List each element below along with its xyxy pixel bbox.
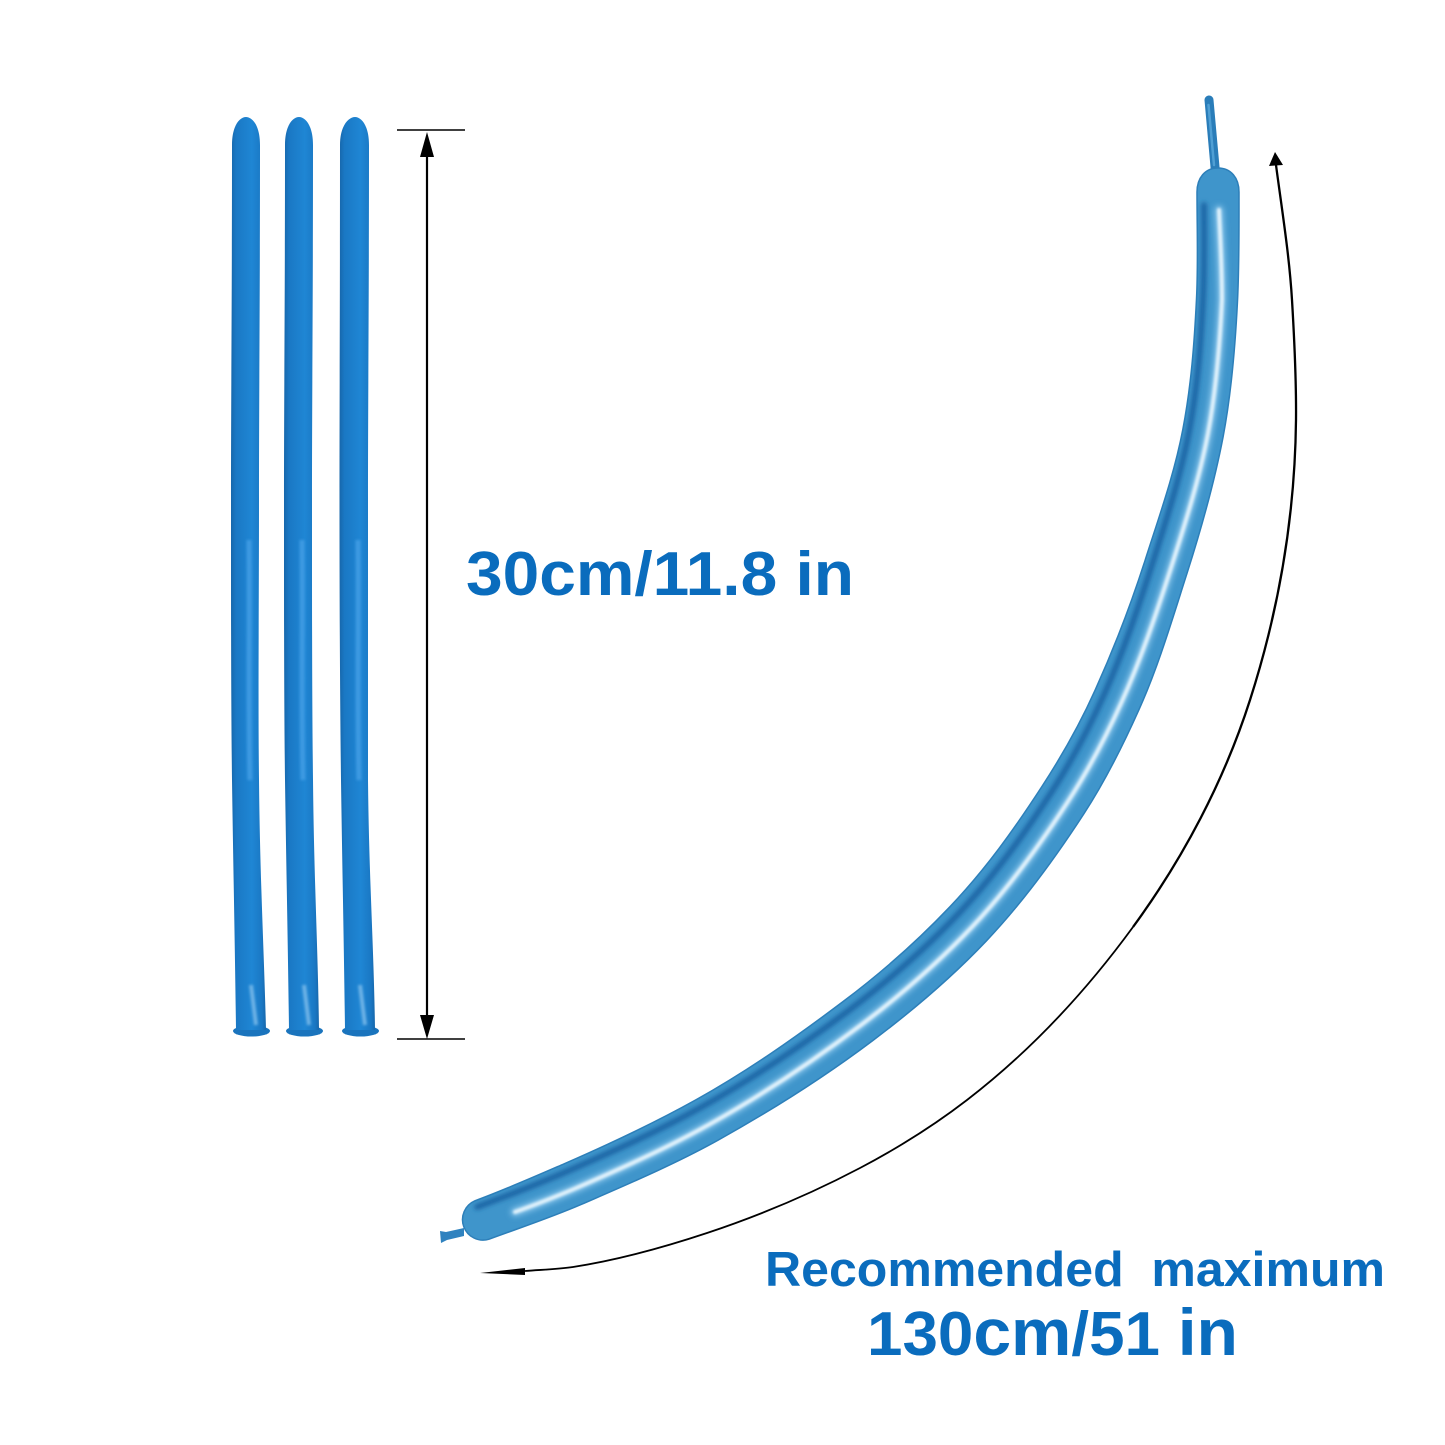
- white reflection streak: [515, 210, 1222, 1212]
- soft light band: [515, 210, 1222, 1212]
- balloon knot: [440, 1228, 464, 1243]
- label: 30cm/11.8 in: 30cm/11.8 in: [466, 540, 854, 609]
- uninflated balloon 2: [284, 117, 323, 1036]
- balloon tip: [1209, 100, 1216, 178]
- balloon body: [463, 168, 1239, 1240]
- label: 130cm/51 in: 130cm/51 in: [867, 1295, 1238, 1369]
- dimension arrow: 30cm: [397, 130, 465, 1039]
- label: recommended maximum: Recommended maximum: [765, 1243, 1385, 1297]
- inflated long balloon: [440, 100, 1239, 1243]
- uninflated balloon 3: [340, 117, 379, 1036]
- dark reflection streak: [477, 205, 1204, 1207]
- curved length arrow: [480, 152, 1296, 1275]
- uninflated balloon 1: [231, 117, 270, 1036]
